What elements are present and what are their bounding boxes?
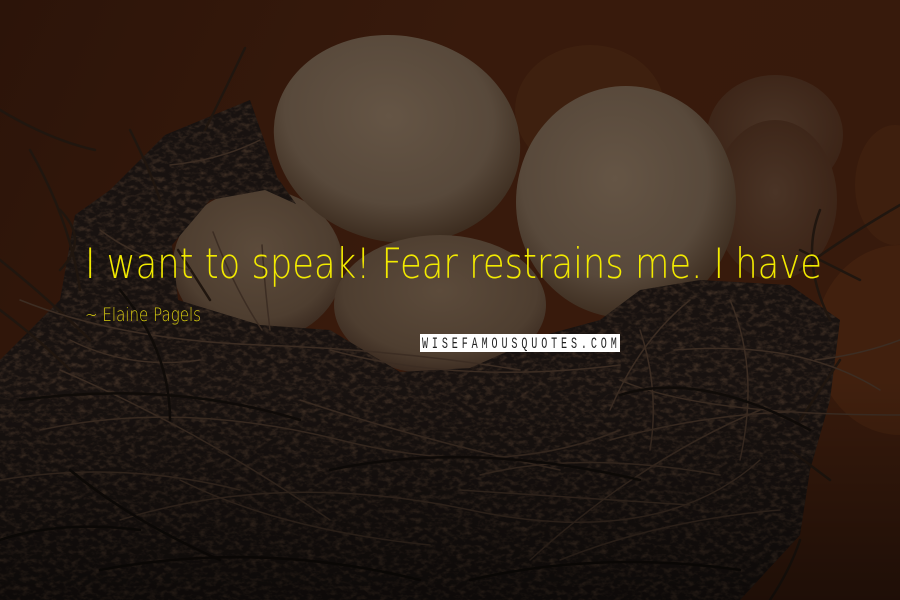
egg: far back faint [515, 45, 665, 175]
egg: centre lower [334, 235, 546, 375]
egg: right large [516, 86, 736, 318]
egg: far right upper [855, 125, 900, 245]
egg: left lower [173, 189, 343, 341]
lower shading [0, 380, 900, 600]
nest body [0, 100, 840, 600]
egg: far right lower [815, 245, 900, 435]
egg: top centre [254, 12, 540, 266]
nest texture [0, 100, 840, 600]
watermark: WISEFAMOUSQUOTES.COM [422, 336, 621, 354]
egg: back right upper [707, 75, 843, 195]
twigs: light strands [0, 140, 900, 560]
author attribution: ~ Elaine Pagels [85, 304, 201, 326]
eggs [173, 12, 900, 435]
egg: back right [713, 120, 837, 280]
twigs: dark strands [0, 290, 810, 580]
